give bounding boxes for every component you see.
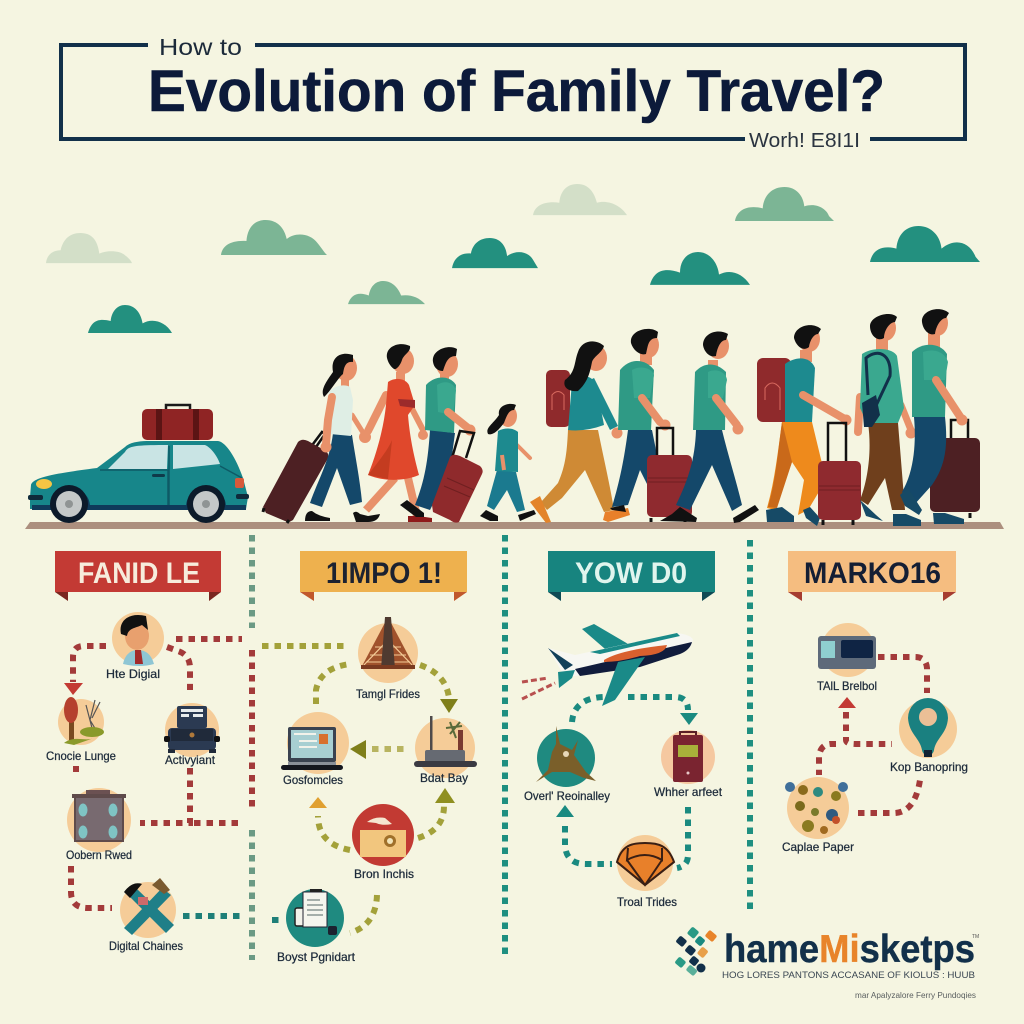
column dividers bbox=[252, 535, 750, 960]
icon: harbor scene bbox=[414, 716, 477, 778]
logo block bbox=[674, 926, 979, 1000]
car with roof luggage bbox=[28, 405, 249, 523]
icon: luggage case bbox=[67, 788, 131, 852]
banner: FANID LE bbox=[55, 551, 221, 601]
traveler: woman with dark suitcase bbox=[263, 354, 362, 523]
label: Gosfomcles bbox=[283, 773, 343, 787]
label: Oobern Rwed bbox=[66, 848, 132, 862]
traveler: man with red case bbox=[610, 329, 692, 522]
banner: YOW D0: YOW D0 bbox=[575, 557, 687, 590]
traveler: woman with backpack bbox=[530, 341, 630, 523]
traveler: woman in red dress bbox=[353, 344, 432, 522]
traveler: man with red suitcase bbox=[400, 347, 483, 523]
logo wordmark: hameMisketps bbox=[724, 928, 975, 971]
banner: MARKO16: MARKO16 bbox=[804, 557, 941, 590]
icon: teal ring bulb bbox=[899, 698, 957, 758]
label: Whher arfeet bbox=[654, 785, 723, 799]
label: Digital Chaines bbox=[109, 939, 183, 953]
label: Hte Digial bbox=[106, 667, 160, 681]
panel: column 2 bbox=[262, 551, 477, 964]
flow arrows column 4 bbox=[819, 657, 927, 813]
logo footnote: mar Apalyzalore Ferry Pundoqies bbox=[855, 991, 976, 1000]
panel: column 1 bbox=[46, 551, 242, 953]
icon: front wheel bbox=[50, 485, 90, 523]
trademark: TM bbox=[972, 934, 979, 940]
flow arrows column 3 bbox=[556, 697, 698, 868]
icon: vehicle front bbox=[164, 703, 220, 757]
label: Bron Inchis bbox=[354, 867, 414, 881]
icon: device bbox=[818, 623, 876, 677]
label: Kop Banopring bbox=[890, 760, 968, 774]
banner: 1IMPO 1!: 1IMPO 1! bbox=[326, 557, 442, 590]
icon: rear wheel bbox=[186, 485, 226, 523]
traveler: man walking bbox=[660, 331, 759, 523]
label: Cnocie Lunge bbox=[46, 749, 116, 763]
icon: person portrait bbox=[112, 612, 164, 666]
icon: laptop bbox=[281, 712, 349, 774]
title frame bbox=[61, 34, 965, 152]
banner: 1IMPO 1! bbox=[300, 551, 467, 601]
label: Troal Trides bbox=[617, 895, 677, 909]
title: Evolution of Family Travel? bbox=[148, 59, 885, 124]
flow arrows column 1 bbox=[64, 639, 242, 916]
icon: red folder bbox=[352, 804, 414, 866]
label: Overl' Reoinalley bbox=[524, 789, 610, 803]
flow arrows column 2 bbox=[262, 646, 458, 933]
panel: column 3 bbox=[522, 551, 723, 909]
label: TAlL Brelbol bbox=[817, 679, 877, 693]
kicker: How to: How to bbox=[159, 34, 242, 60]
icon: map scatter bbox=[785, 777, 849, 839]
banner: MARKO16 bbox=[788, 551, 956, 601]
logo tagline: HOG LORES PANTONS ACCASANE OF KIOLUS : HUUB bbox=[722, 970, 975, 981]
icon: landscape trees bbox=[58, 697, 104, 745]
subtitle tag: Worh! E8I1I bbox=[749, 130, 860, 152]
label: Caplae Paper bbox=[782, 840, 854, 854]
banner: YOW D0 bbox=[548, 551, 715, 601]
icon: parachute gem bbox=[617, 835, 674, 891]
label: Tamgl Frides bbox=[356, 687, 420, 701]
traveler: man with backpack in orange trousers bbox=[757, 325, 861, 526]
traveler: child bbox=[480, 404, 536, 521]
icon: roof suitcase bbox=[142, 405, 213, 440]
ground line bbox=[25, 522, 1004, 529]
label: Bdat Bay bbox=[420, 771, 468, 785]
icon: logo mark bbox=[674, 926, 717, 976]
traveler: man with shoulder bag bbox=[858, 314, 921, 526]
label: Boyst Pgnidart bbox=[277, 950, 356, 964]
icon: creature bbox=[536, 726, 596, 787]
panel: column 4 bbox=[782, 551, 968, 854]
icon: crossed tools bbox=[120, 878, 176, 938]
banner: FANID LE: FANID LE bbox=[78, 557, 200, 590]
traveler: man with dark suitcase bbox=[900, 309, 980, 524]
clouds bbox=[46, 184, 980, 333]
icon: tower pavilion bbox=[358, 617, 418, 683]
icon: maroon bag bbox=[661, 730, 715, 784]
icon: airplane bbox=[522, 624, 693, 706]
icon: document on teal bbox=[286, 889, 344, 947]
label: Activyiant bbox=[165, 753, 216, 767]
